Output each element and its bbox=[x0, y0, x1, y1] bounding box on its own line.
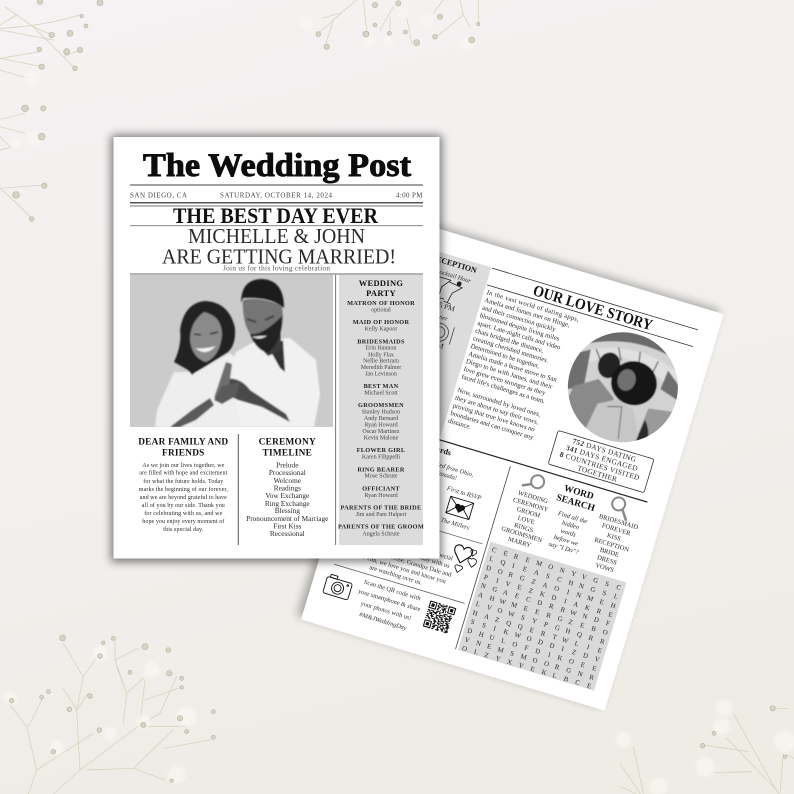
word search grid: PIVEZKDIAKRE bbox=[483, 574, 613, 619]
reception panel: Cocktail Hour bbox=[434, 268, 472, 285]
reception panel bbox=[370, 246, 491, 440]
icon: envelope with heart bbox=[446, 496, 474, 520]
panel: in memory: are watching over us. bbox=[369, 564, 423, 587]
flower sprig: top left bbox=[0, 0, 103, 221]
love story text: love grew even stronger as they bbox=[463, 366, 547, 397]
panel: dear family and friends bbox=[138, 437, 228, 533]
man's face bbox=[242, 298, 284, 335]
panel: wedding party: Jim and Pam Halpert bbox=[356, 512, 407, 518]
panel: dear family and friends: all of you by our side. Thank you bbox=[142, 502, 225, 509]
panel: word search: DRESS bbox=[596, 554, 618, 567]
panel: word search: LOVE bbox=[517, 515, 535, 526]
panel: dear family and friends: marks the beginning of our forever, bbox=[139, 486, 228, 493]
icon: dinner plate bbox=[423, 320, 454, 345]
panel: wedding party: Mose Schrute bbox=[364, 474, 398, 480]
panel: wedding party: Erin Hannon bbox=[366, 346, 396, 352]
word search grid: NGAECDRRWNDF bbox=[480, 582, 611, 628]
date line: SAN DIEGO, CA bbox=[130, 192, 187, 200]
panel: word search: before we bbox=[553, 534, 579, 548]
panel: photo sharing: your photos with us! bbox=[360, 600, 412, 622]
panel: word search: RECEPTION bbox=[593, 537, 630, 554]
headline: ARE GETTING MARRIED! bbox=[162, 244, 396, 268]
word search grid: LQIEASCHNGSL bbox=[488, 556, 619, 601]
back page shadow bbox=[297, 219, 720, 707]
panel: guest awards: New York, and Canada! bbox=[396, 458, 458, 482]
icon: magnifier right bbox=[608, 496, 632, 521]
panel: wedding party: RING BEARER bbox=[357, 466, 405, 473]
panel: ceremony timeline: TIMELINE bbox=[263, 448, 312, 458]
icon: hearts bbox=[448, 544, 480, 577]
panel: ceremony timeline: CEREMONY bbox=[259, 437, 316, 447]
panel: wedding party: WEDDING bbox=[359, 278, 403, 288]
panel: ceremony timeline: Vow Exchange bbox=[265, 491, 309, 500]
love story text: Diego to be with James, and their bbox=[465, 358, 554, 391]
love story text: Amelia made a brave move to San bbox=[467, 351, 558, 384]
love story text: apart. Late-night calls and video bbox=[477, 320, 562, 352]
panel: wedding party: Stanley Hudson bbox=[362, 410, 400, 416]
panel: word search: WORD bbox=[563, 484, 595, 502]
panel: word search: BRIDESMAID bbox=[598, 513, 639, 531]
panel: in memory: Uncle Tim, we love you and know you bbox=[349, 550, 447, 586]
woman's hair bbox=[174, 301, 235, 375]
love story text: faced life's challenges as a team. bbox=[461, 374, 546, 405]
love story text: distance. bbox=[447, 418, 472, 431]
man's neck and beard bbox=[264, 333, 282, 357]
panel: dear family and friends: this special day. bbox=[163, 527, 204, 533]
back page bbox=[301, 223, 724, 711]
panel: wedding party: PARENTS OF THE BRIDE bbox=[341, 505, 421, 512]
panel: wedding party: optional bbox=[371, 308, 391, 314]
panel: ceremony timeline: Pronouncement of Marriage bbox=[246, 514, 328, 523]
panel: wedding party: BRIDESMAIDS bbox=[357, 338, 405, 345]
panel: dear family and friends: for what the future holds. Today bbox=[143, 478, 223, 485]
panel: ceremony timeline: Ring Exchange bbox=[265, 499, 310, 508]
panel: wedding party: Nellie Bertram bbox=[363, 359, 399, 365]
panel: wedding party: OFFICIANT bbox=[362, 486, 400, 493]
panel: ceremony timeline: Blessing bbox=[275, 506, 300, 515]
panel: word search: Find all the bbox=[556, 510, 588, 526]
stats box bbox=[548, 430, 654, 493]
panel: word search: WEDDING bbox=[517, 490, 549, 505]
panel: word search: RINGS bbox=[513, 522, 534, 534]
panel: in memory: We remember those who are so special bbox=[356, 527, 454, 562]
panel: ceremony timeline: Readings bbox=[274, 484, 301, 492]
stats box: TOGETHER bbox=[576, 463, 619, 484]
panel: ceremony timeline: First Kiss bbox=[273, 522, 302, 530]
love story text: boundaries and can conquer any bbox=[450, 410, 535, 442]
stats box: 8 COUNTRIES VISITED bbox=[559, 450, 641, 482]
panel: photo sharing bbox=[319, 568, 456, 644]
panel: word search: CEREMONY bbox=[512, 497, 549, 514]
icon: cocktail glasses bbox=[431, 275, 464, 306]
heading: our love story bbox=[487, 268, 698, 347]
stats box: 341 DAYS ENGAGED bbox=[565, 443, 639, 473]
word search grid: AHWMEERGZEBO bbox=[477, 592, 608, 637]
panel: guest awards: The Millers bbox=[440, 517, 471, 532]
reception panel: RECEPTION bbox=[430, 253, 478, 275]
date line bbox=[130, 185, 423, 206]
panel: wedding party: Meredith Palmer bbox=[361, 365, 401, 371]
front page shadow bbox=[111, 135, 442, 562]
flower sprig: top centre bbox=[300, 0, 480, 50]
love story text: chats bridged the distance, bbox=[474, 328, 545, 355]
headline: MICHELLE & JOHN bbox=[188, 224, 365, 248]
love story text: blossomed despite living miles bbox=[479, 312, 560, 343]
panel: wedding party: Ryan Howard bbox=[364, 423, 398, 429]
stats box: 752 DAYS DATING bbox=[572, 436, 638, 464]
panel: word search: GROOMSMEN bbox=[500, 525, 543, 544]
flower sprig: bottom right bbox=[616, 700, 794, 794]
panel: word search: say "I Do"? bbox=[548, 541, 580, 556]
headline: Join us for this loving celebration bbox=[223, 263, 330, 272]
panel: wedding party: Kevin Malone bbox=[364, 435, 399, 441]
circular couple photo bbox=[568, 332, 678, 442]
love story text: and their connection quickly bbox=[481, 305, 557, 333]
panel: guest awards: First to RSVP bbox=[445, 485, 482, 502]
reception panel: Dinner bbox=[428, 311, 449, 323]
panel: dear family and friends: are filled with hope and excitement bbox=[139, 470, 228, 477]
heading: our love story: OUR LOVE STORY bbox=[531, 282, 655, 334]
panel: ceremony timeline: Recessional bbox=[270, 529, 305, 538]
panel: dear family and friends: As we join our lives together, we bbox=[142, 463, 225, 469]
panel: wedding party: PARENTS OF THE GROOM bbox=[338, 524, 424, 531]
headline bbox=[130, 203, 423, 274]
panel: wedding party: Karen Filippelli bbox=[362, 455, 400, 461]
panel: dear family and friends: DEAR FAMILY AND bbox=[138, 437, 228, 447]
panel: dear family and friends: FRIENDS bbox=[162, 448, 205, 458]
panel: word search: BRIDE bbox=[599, 547, 620, 559]
word search grid: LVOWSYPGHQRR bbox=[475, 601, 606, 646]
panel: photo sharing: Scan the QR code with bbox=[363, 579, 422, 603]
panel: wedding party: PARTY bbox=[366, 288, 396, 298]
word search grid: DORGZAOINMEH bbox=[485, 565, 616, 610]
panel: wedding party bbox=[338, 275, 424, 545]
panel: photo sharing: #M&JWeddingDay bbox=[358, 611, 408, 632]
woman's shirt bbox=[155, 353, 250, 427]
panel: wedding party: FLOWER GIRL bbox=[357, 447, 405, 454]
reception panel: 7:00 PM bbox=[417, 335, 445, 351]
panel: wedding party: Angela Schrute bbox=[362, 531, 400, 537]
panel: in memory: In Loving Memory bbox=[379, 516, 440, 543]
word search grid: DHULOFDIKOEE bbox=[466, 627, 597, 673]
panel: wedding party: Michael Scott bbox=[364, 391, 398, 397]
panel: wedding party: MATRON OF HONOR bbox=[347, 300, 415, 307]
icon: camera bbox=[323, 573, 353, 600]
panel: wedding party: Ryan Howard bbox=[364, 493, 398, 499]
panel: word search: FOREVER bbox=[601, 522, 632, 538]
icon: magnifier left bbox=[522, 471, 546, 491]
love story text: In the vast world of dating apps, bbox=[486, 289, 580, 324]
icon: QR code bbox=[423, 601, 456, 633]
panel: wedding party: Oscar Martinez bbox=[362, 429, 400, 435]
love story text: Now, surrounded by loved ones, bbox=[456, 387, 542, 419]
panel: dear family and friends: hope you enjoy every moment of bbox=[142, 518, 224, 525]
panel: wedding party: Kelly Kapoor bbox=[365, 326, 397, 332]
headline: THE BEST DAY EVER bbox=[173, 203, 379, 228]
arms and hands bbox=[170, 398, 214, 427]
love story text: they are about to say their vows, bbox=[454, 395, 540, 426]
word search grid: VNEMSMOORGNR bbox=[464, 637, 595, 682]
panel: in memory: to us and cannot be here today with us bbox=[355, 535, 451, 570]
panel: dear family and friends: for celebrating with us, and we bbox=[144, 510, 223, 517]
love story text: Amelia and James met on Hinge, bbox=[484, 297, 571, 329]
love story text: creating cherished memories. bbox=[472, 335, 550, 365]
front page bbox=[114, 137, 440, 558]
panel: ceremony timeline: Processional bbox=[269, 468, 306, 477]
word search grid: HAZQQERTWLIE bbox=[472, 610, 603, 655]
panel: guest awards: Guest Awards bbox=[404, 435, 452, 457]
date line: SATURDAY, OCTOBER 14, 2024 bbox=[220, 192, 332, 200]
love story text: proving that true love knows no bbox=[452, 402, 536, 434]
masthead title: The Wedding Post bbox=[143, 148, 411, 184]
panel: word search: hidden bbox=[561, 520, 580, 531]
panel: dear family and friends: and we are beyond grateful to have bbox=[140, 494, 227, 501]
panel: guest awards: Farthest guests traveled from Ohio, bbox=[384, 446, 475, 479]
panel: word search bbox=[458, 466, 649, 692]
panel: wedding party: GROOMSMEN bbox=[358, 402, 404, 409]
couple photo bbox=[130, 275, 333, 427]
love story text: Determined to be together, bbox=[470, 343, 540, 370]
panel: word search: KISS bbox=[606, 532, 622, 543]
reception panel: 5:45 PM bbox=[428, 297, 456, 314]
panel: in memory bbox=[344, 510, 481, 600]
panel: ceremony timeline bbox=[246, 437, 328, 538]
panel: word search: SEARCH bbox=[555, 493, 596, 514]
word search grid: SSIKWODDIZDV bbox=[470, 619, 600, 664]
flower sprig: bottom left bbox=[3, 635, 215, 794]
panel: wedding party: Andy Bernard bbox=[364, 416, 398, 422]
panel: wedding party: BEST MAN bbox=[364, 383, 399, 390]
panel: word search: words bbox=[560, 528, 577, 539]
panel: photo sharing: your smartphone & share bbox=[357, 588, 421, 613]
panel: ceremony timeline: Welcome bbox=[274, 476, 301, 485]
word search grid: CEREMONYVGSC bbox=[491, 547, 622, 592]
panel: in memory: To our Grandma Rose, Grandpa Dale and bbox=[348, 541, 453, 579]
panel: word search: GROOM bbox=[516, 506, 541, 520]
man's hair bbox=[241, 279, 284, 308]
date line: 4:00 PM bbox=[396, 192, 423, 200]
word search grid bbox=[458, 542, 626, 692]
love story text bbox=[447, 289, 580, 452]
panel: guest awards bbox=[369, 430, 493, 533]
panel: word search: VOWS bbox=[594, 562, 615, 574]
panel: wedding party: Jan Levinson bbox=[365, 371, 397, 377]
panel: word search: MARRY bbox=[507, 536, 532, 549]
panel: wedding party: Holly Flax bbox=[368, 352, 394, 358]
word search grid: OLZYXVEKLBCE bbox=[461, 645, 592, 691]
panel: ceremony timeline: Prelude bbox=[276, 460, 298, 470]
man's shirt bbox=[230, 338, 320, 427]
woman's face bbox=[190, 312, 222, 362]
panel: wedding party: MAID OF HONOR bbox=[353, 319, 409, 326]
